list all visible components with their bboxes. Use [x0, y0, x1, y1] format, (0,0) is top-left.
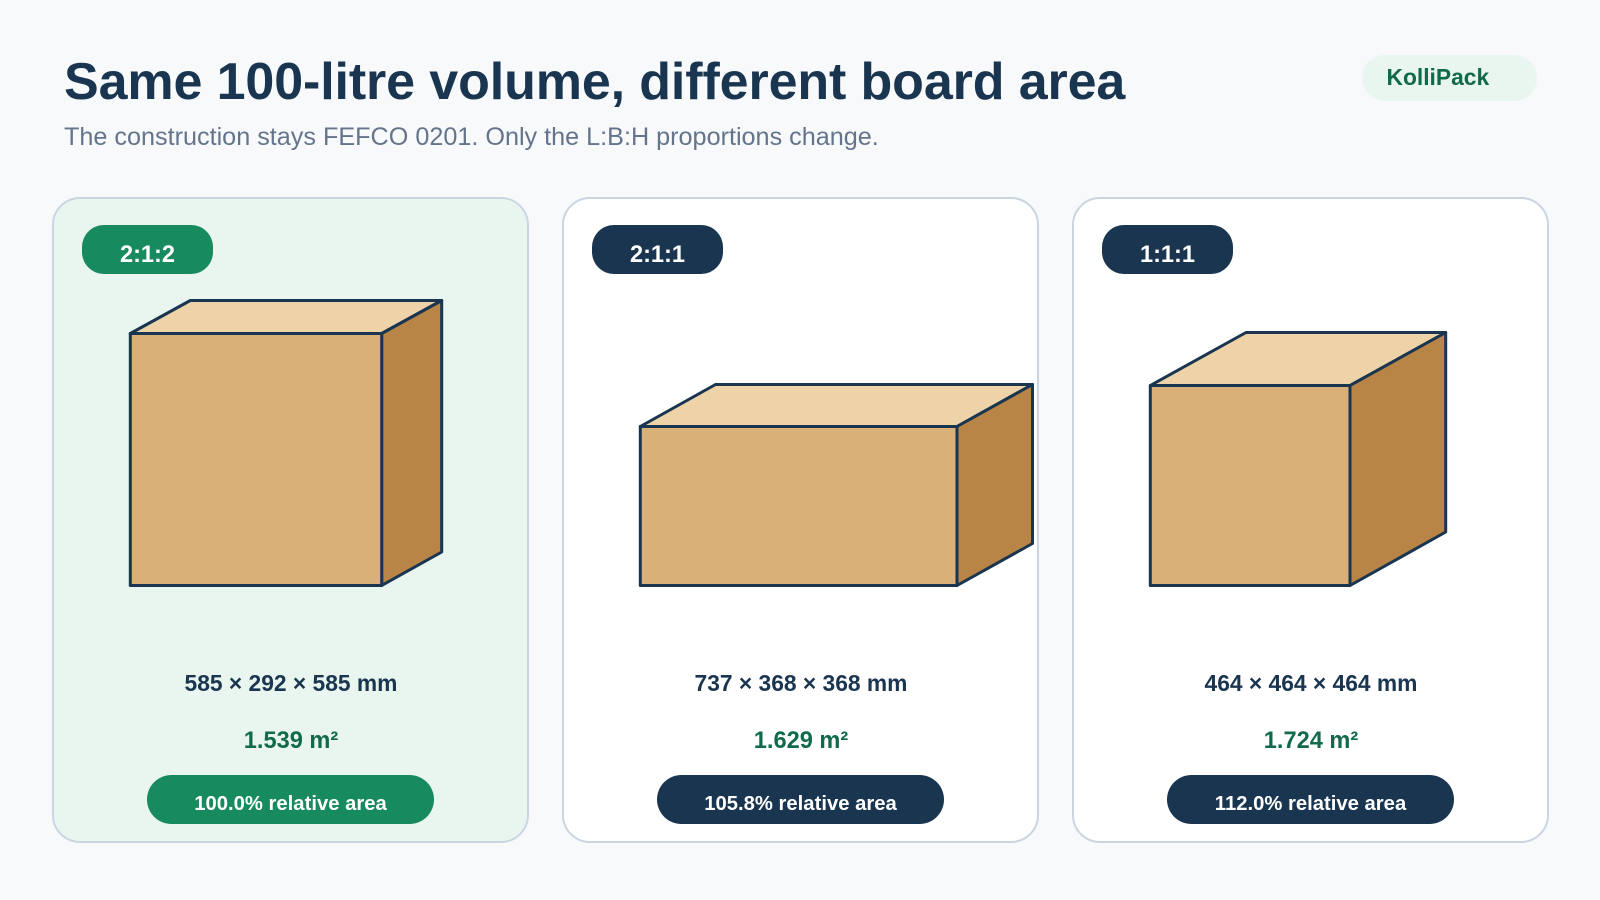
ratio badge — [592, 225, 723, 274]
ratio badge: 1:1:1 — [1140, 242, 1195, 268]
brand badge — [1362, 55, 1537, 101]
panel: 2:1:2 — [52, 197, 529, 843]
relative area badge: 112.0% relative area — [1215, 793, 1406, 815]
title: Same 100-litre volume, different board area — [64, 53, 1125, 111]
relative area badge — [657, 775, 944, 824]
brand badge: KolliPack — [1386, 64, 1489, 90]
ratio badge — [1102, 225, 1233, 274]
relative area badge — [1167, 775, 1454, 824]
relative area badge — [147, 775, 434, 824]
dimensions: 585 × 292 × 585 mm — [185, 670, 397, 696]
icon: box 2:1:2 — [130, 300, 442, 586]
dimensions: 464 × 464 × 464 mm — [1205, 670, 1417, 696]
subtitle: The construction stays FEFCO 0201. Only the L:B:H proportions change. — [64, 122, 879, 150]
board area: 1.539 m² — [244, 728, 338, 754]
dimensions: 737 × 368 × 368 mm — [695, 670, 907, 696]
panel: 2:1:1 — [562, 197, 1039, 843]
ratio badge: 2:1:2 — [120, 242, 175, 268]
board area: 1.724 m² — [1264, 728, 1358, 754]
board area: 1.629 m² — [754, 728, 848, 754]
relative area badge: 100.0% relative area — [194, 793, 387, 815]
icon: box 2:1:1 — [640, 384, 1032, 586]
relative area badge: 105.8% relative area — [704, 793, 897, 815]
icon: box 1:1:1 — [1150, 332, 1446, 586]
panel: 1:1:1 — [1072, 197, 1549, 843]
ratio badge — [82, 225, 213, 274]
ratio badge: 2:1:1 — [630, 242, 685, 268]
